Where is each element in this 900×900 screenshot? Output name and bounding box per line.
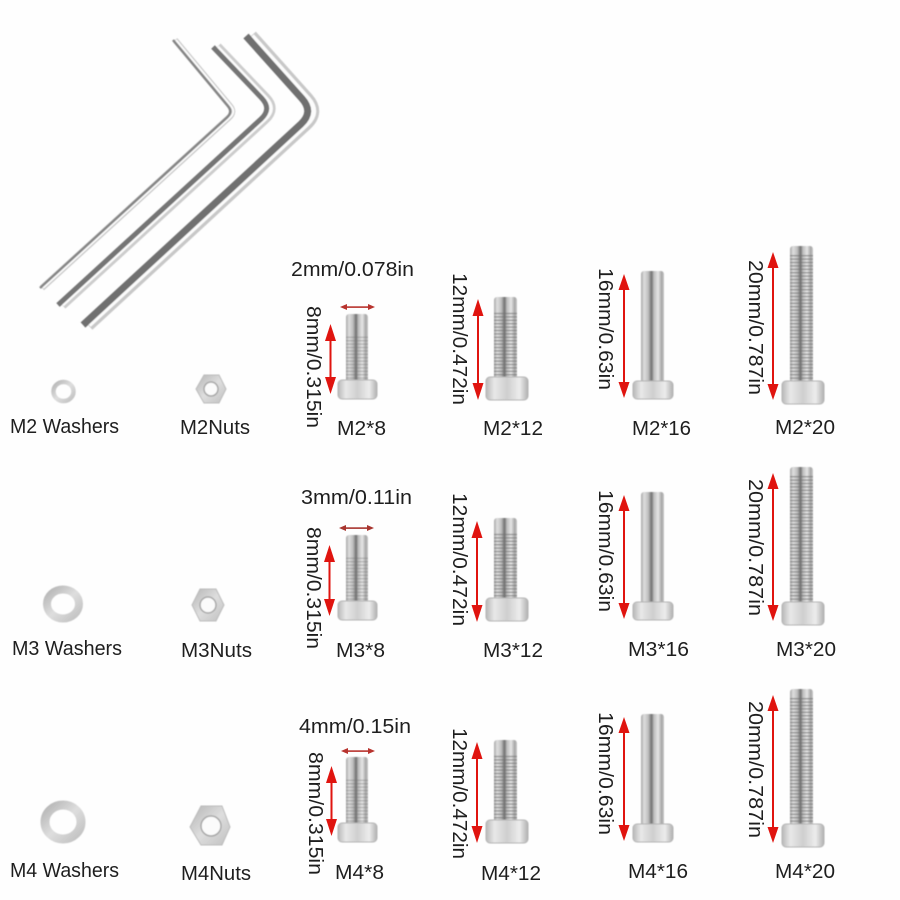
label: M3*20 length: 20mm/0.787in: [744, 479, 766, 616]
icon: M4 nut: [190, 806, 230, 845]
label: M4*12: M4*12: [481, 863, 541, 885]
icon: M4 washer: [45, 805, 81, 839]
icon: M2 washer: [54, 382, 74, 401]
label: M2*20 length: 20mm/0.787in: [744, 260, 766, 395]
icon: M3 washer: [47, 590, 79, 618]
label: M3*12: M3*12: [483, 640, 543, 662]
bolt: M3*16: [633, 492, 673, 620]
label: M2*12 length: 12mm/0.472in: [448, 273, 470, 405]
bolt: M3*20: [782, 467, 824, 625]
label: M2*20: M2*20: [775, 417, 835, 439]
label: M2*12: M2*12: [483, 418, 543, 440]
bolt: M3*12: [486, 518, 528, 621]
label: M3Nuts: M3Nuts: [181, 640, 252, 662]
label: M4*20 length: 20mm/0.787in: [744, 701, 766, 838]
arrow: M2 diameter: [340, 304, 375, 310]
label: M2*16 length: 16mm/0.63in: [594, 268, 616, 390]
label: M2*8: M2*8: [337, 418, 386, 440]
icon: M3 nut: [192, 589, 224, 621]
label: M3*20: M3*20: [776, 639, 836, 661]
label: M4*8 length: 8mm/0.315in: [304, 752, 326, 875]
panel: M4 row: [10, 689, 835, 885]
arrow: M4*8 length: [326, 766, 337, 836]
arrow: M4*20 length: [768, 695, 778, 843]
bolt: M2*12: [486, 297, 528, 400]
label: M4*16 length: 16mm/0.63in: [594, 712, 616, 835]
label: M2*8 length: 8mm/0.315in: [302, 306, 324, 428]
label: M4 diameter: 4mm/0.15in: [299, 716, 411, 738]
label: M3*12 length: 12mm/0.472in: [448, 493, 470, 626]
arrow: M3*16 length: [618, 495, 630, 619]
arrow: M2*8 length: [325, 324, 336, 394]
label: M3*8: M3*8: [336, 640, 385, 662]
icon: M2 nut: [196, 375, 226, 403]
large hex key: [83, 36, 314, 325]
arrow: M4 diameter: [341, 748, 375, 754]
label: M2 Washers: M2 Washers: [10, 416, 119, 438]
arrow: M3*8 length: [324, 545, 335, 616]
arrow: M4*16 length: [618, 717, 630, 841]
bolt: M2*16: [633, 271, 673, 399]
bolt: M4*12: [486, 740, 528, 843]
label: M2Nuts: M2Nuts: [180, 417, 250, 439]
bolt: M4*16: [633, 714, 673, 842]
small hex key: [40, 40, 233, 288]
label: M4*8: M4*8: [335, 862, 384, 884]
label: M4*16: M4*16: [628, 861, 688, 883]
bolt: M2*8: [338, 314, 377, 399]
label: M2 diameter: 2mm/0.078in: [291, 259, 414, 281]
panel: M3 row: [12, 467, 836, 662]
label: M4Nuts: M4Nuts: [181, 863, 251, 885]
label: M3 Washers: M3 Washers: [12, 638, 122, 660]
label: M4*20: M4*20: [775, 861, 835, 883]
bolt: M4*8: [338, 757, 377, 842]
label: M3*16: M3*16: [628, 639, 689, 661]
label: M2*16: M2*16: [632, 418, 691, 440]
arrow: M3*20 length: [768, 473, 778, 621]
arrow: M2*12 length: [472, 299, 484, 400]
label: M3*16 length: 16mm/0.63in: [594, 490, 616, 612]
arrow: M2*20 length: [768, 252, 778, 400]
bolt: M4*20: [782, 689, 824, 847]
arrow: M3*12 length: [472, 521, 482, 622]
label: M3 diameter: 3mm/0.11in: [301, 487, 412, 509]
arrow: M4*12 length: [472, 742, 482, 843]
panel: M2 row: [10, 246, 835, 440]
label: M4*12 length: 12mm/0.472in: [448, 728, 470, 859]
icon: three hex keys: [40, 36, 314, 325]
label: M3*8 length: 8mm/0.315in: [302, 527, 324, 649]
arrow: M3 diameter: [339, 525, 374, 531]
arrow: M2*16 length: [618, 274, 630, 398]
label: M4 Washers: M4 Washers: [10, 860, 119, 882]
bolt: M3*8: [338, 535, 377, 620]
medium hex key: [58, 47, 271, 305]
bolt: M2*20: [782, 246, 824, 404]
